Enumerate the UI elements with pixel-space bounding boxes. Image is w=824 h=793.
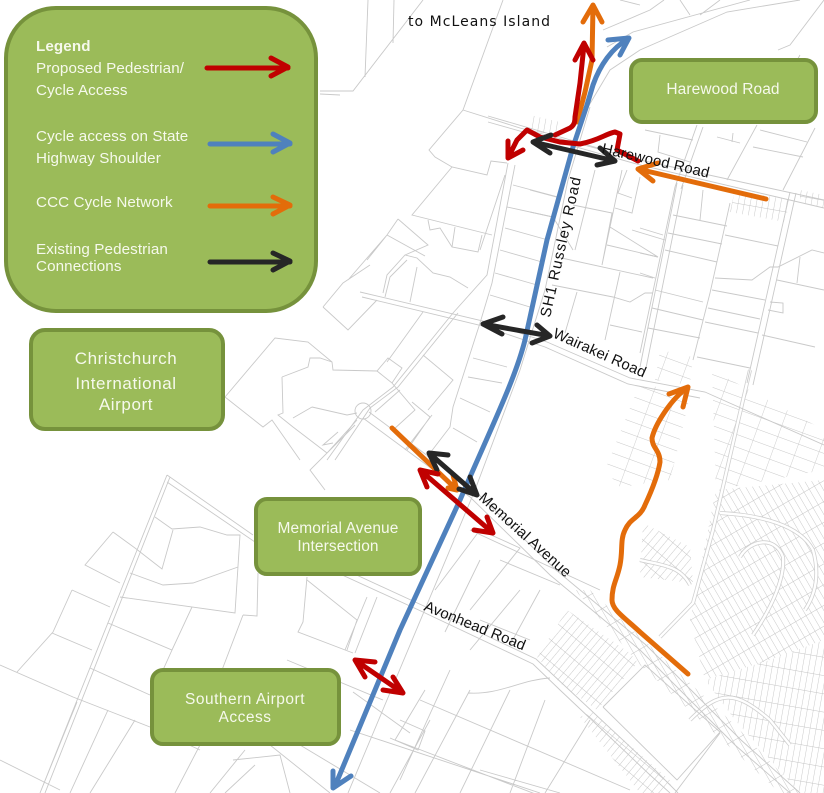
legend text: state highway shoulder: Cycle access on State: [36, 128, 188, 145]
legend text: proposed access: Cycle Access: [36, 82, 128, 99]
Russley Road side lines: [327, 107, 590, 793]
residential areas: [528, 115, 824, 793]
arrow: red proposed access at Harewood Road: [508, 43, 638, 161]
airport parcels: [225, 338, 453, 490]
road label: Wairakei Road: Wairakei Road: [550, 325, 649, 381]
arrow: orange Harewood Road cycle network: [638, 163, 766, 199]
arrow: red proposed access at southern airport: [355, 660, 403, 693]
Wairakei Road: [360, 292, 824, 445]
callout: Southern Airport Access: [152, 670, 339, 744]
arrow: red proposed access at Memorial Avenue: [420, 470, 493, 533]
callout: Memorial Avenue Intersection: [256, 499, 420, 574]
roundabout: [355, 403, 371, 419]
arrow: blue state highway shoulder cycle access: [333, 38, 629, 788]
callout: Southern Airport Access: Southern Airport: [185, 691, 305, 708]
callout: Memorial Avenue Intersection: Intersection: [297, 538, 379, 555]
legend arrow: black: [210, 253, 290, 270]
legend arrow: orange: [210, 197, 290, 214]
legend arrow: blue: [210, 134, 290, 152]
callout: Harewood Road: [631, 60, 816, 122]
callout: Christchurch International Airport: Christchurch: [75, 349, 177, 368]
road label: Avonhead Road: Avonhead Road: [422, 598, 528, 654]
Memorial Avenue: [363, 412, 800, 793]
east of Russley parcels: [530, 170, 683, 368]
legend text: existing connections: Connections: [36, 258, 122, 275]
Harewood Road: [463, 110, 824, 208]
arrow: orange local cycle route: [612, 387, 688, 674]
road label: Memorial Avenue: Memorial Avenue: [475, 489, 574, 581]
legend text: existing connections: Existing Pedestrian: [36, 241, 168, 258]
legend text: state highway shoulder: Highway Shoulder: [36, 150, 161, 167]
callout: Christchurch International Airport: Airport: [99, 395, 153, 414]
callout: Harewood Road: Harewood Road: [666, 81, 780, 98]
road label: to McLeans Island: to McLeans Island: [408, 14, 550, 30]
callout: Christchurch International Airport: [31, 330, 223, 429]
callout: Memorial Avenue Intersection: Memorial Avenue: [278, 520, 398, 537]
legend text: proposed access: Proposed Pedestrian/: [36, 60, 184, 77]
legend arrow: red: [207, 58, 288, 76]
south-west parcels: [0, 475, 380, 793]
callout: Christchurch International Airport: International: [75, 374, 177, 393]
arrow: black existing connection at Wairakei Road: [483, 317, 550, 343]
north roads: [320, 0, 824, 115]
arrow: orange Memorial Avenue cycle network: [392, 428, 457, 490]
north-west parcels: [323, 0, 558, 442]
residential streets: [640, 370, 816, 745]
road label: SH1 Russley Road: SH1 Russley Road: [537, 176, 585, 319]
legend heading: Legend: [36, 38, 91, 55]
Avonhead Road: [255, 530, 678, 793]
arrow: black existing connection at Harewood Road: [533, 135, 615, 165]
callout: Southern Airport Access: Access: [219, 709, 271, 726]
arrow: orange CCC cycle route to McLeans Island: [577, 5, 602, 122]
road label: Harewood Road: Harewood Road: [600, 140, 711, 182]
south of Memorial parcels: [435, 530, 600, 650]
arrow: black existing connection at Memorial Avenue: [429, 453, 477, 495]
panel: legend: [6, 8, 316, 311]
legend text: CCC network: CCC Cycle Network: [36, 194, 173, 211]
